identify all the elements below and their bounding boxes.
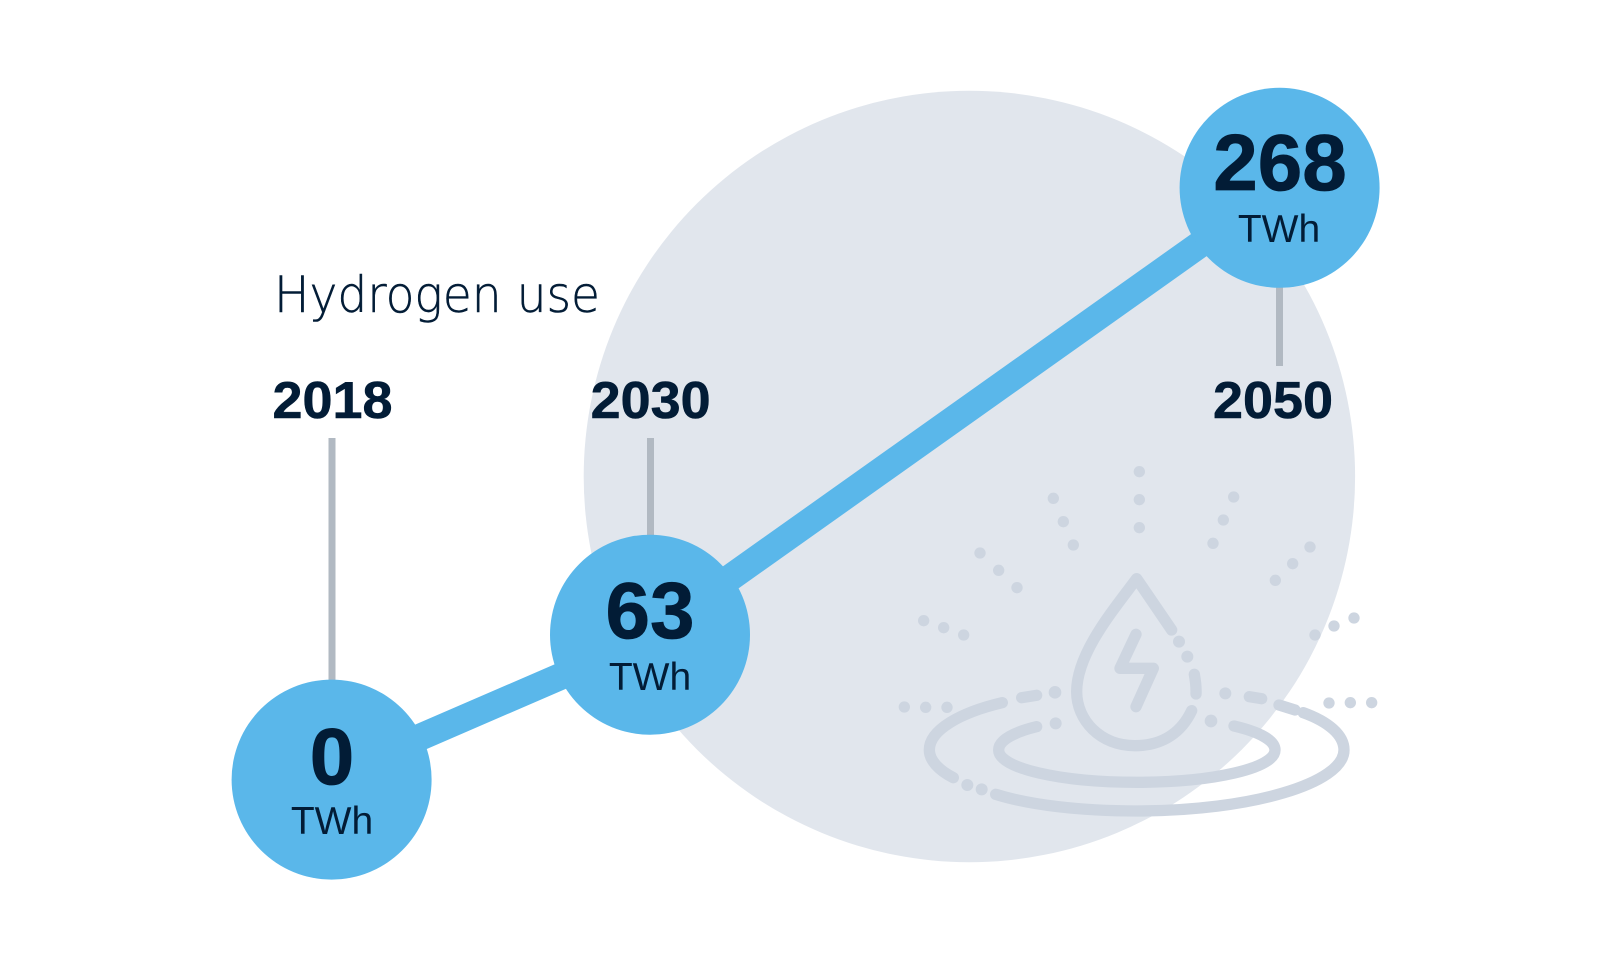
icon: inner ripple [999,726,1275,782]
year stems [328,285,1283,683]
data point: 2018, 0 TWh: TWh [291,800,373,843]
icon: splash dots [899,466,1377,795]
data point: 2018, 0 TWh [232,680,432,880]
data point: 2018, 0 TWh: 0 [310,712,354,801]
data point: 2030, 63 TWh: 63 [606,566,694,655]
icon: lightning bolt [1120,634,1153,707]
icon: outer ripple [929,695,1344,811]
data point: 2050, 268 TWh [1180,88,1380,288]
data point: 2030, 63 TWh: TWh [609,656,691,699]
year label 2018: 2018 [272,372,392,430]
year label 2030: 2030 [591,372,711,430]
year label 2050: 2050 [1213,372,1333,430]
background circle [584,91,1355,862]
growth line [332,188,1280,776]
icon: water drop with lightning bolt and ripples [899,466,1377,811]
data point: 2050, 268 TWh: 268 [1213,118,1347,207]
data point: 2030, 63 TWh [550,535,750,735]
icon: water drop outline [1077,579,1196,746]
title: Hydrogen use [274,266,600,324]
data point: 2050, 268 TWh: TWh [1238,208,1320,251]
